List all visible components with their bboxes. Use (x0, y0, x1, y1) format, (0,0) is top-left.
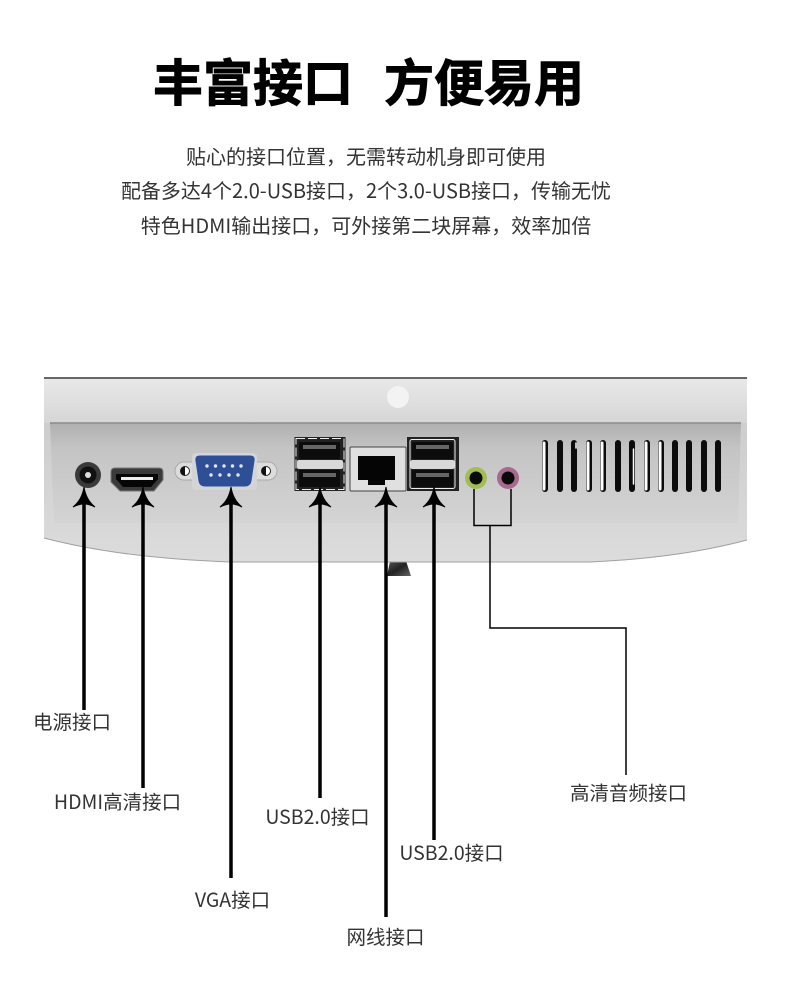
arrow: power (73, 487, 95, 710)
arrow: network (375, 487, 397, 917)
arrow: HDMI (132, 487, 154, 788)
stand foot (387, 561, 411, 576)
icon: USB port left (294, 437, 346, 491)
arrow: VGA (220, 487, 242, 878)
recessed port area (50, 423, 741, 523)
power button (387, 386, 409, 408)
text block: description: 特色HDMI输出接口，可外接第二块屏幕，效率加倍 (141, 210, 591, 239)
icon: USB port right (407, 437, 459, 491)
connector: audio bracket (474, 489, 626, 775)
title: 丰富接口 (153, 44, 353, 116)
arrow: USB left (309, 487, 331, 798)
panel body (44, 378, 747, 562)
label: power: 电源接口 (33, 706, 111, 735)
title: 方便易用 (384, 44, 584, 116)
label: audio: 高清音频接口 (570, 777, 687, 806)
arrow: USB right (423, 487, 445, 840)
text block: description: 贴心的接口位置，无需转动机身即可使用 (186, 141, 546, 170)
title (153, 44, 584, 116)
icon: audio out port (465, 467, 487, 489)
label: USB right: USB2.0接口 (399, 837, 504, 866)
vent slots (544, 443, 718, 489)
label: HDMI: HDMI高清接口 (54, 786, 181, 815)
text block: description (121, 141, 611, 239)
label: USB left: USB2.0接口 (265, 801, 370, 830)
panel: computer rear port panel (44, 377, 747, 576)
icon: VGA port (175, 453, 277, 490)
icon: power port (75, 462, 101, 488)
icon: HDMI port (111, 468, 163, 491)
text block: description: 配备多达4个2.0-USB接口，2个3.0-USB接口，传输无忧 (121, 175, 611, 204)
icon: network port (350, 447, 406, 491)
label: VGA: VGA接口 (195, 884, 270, 913)
label: network: 网线接口 (346, 921, 425, 950)
icon: audio in port (497, 467, 519, 489)
